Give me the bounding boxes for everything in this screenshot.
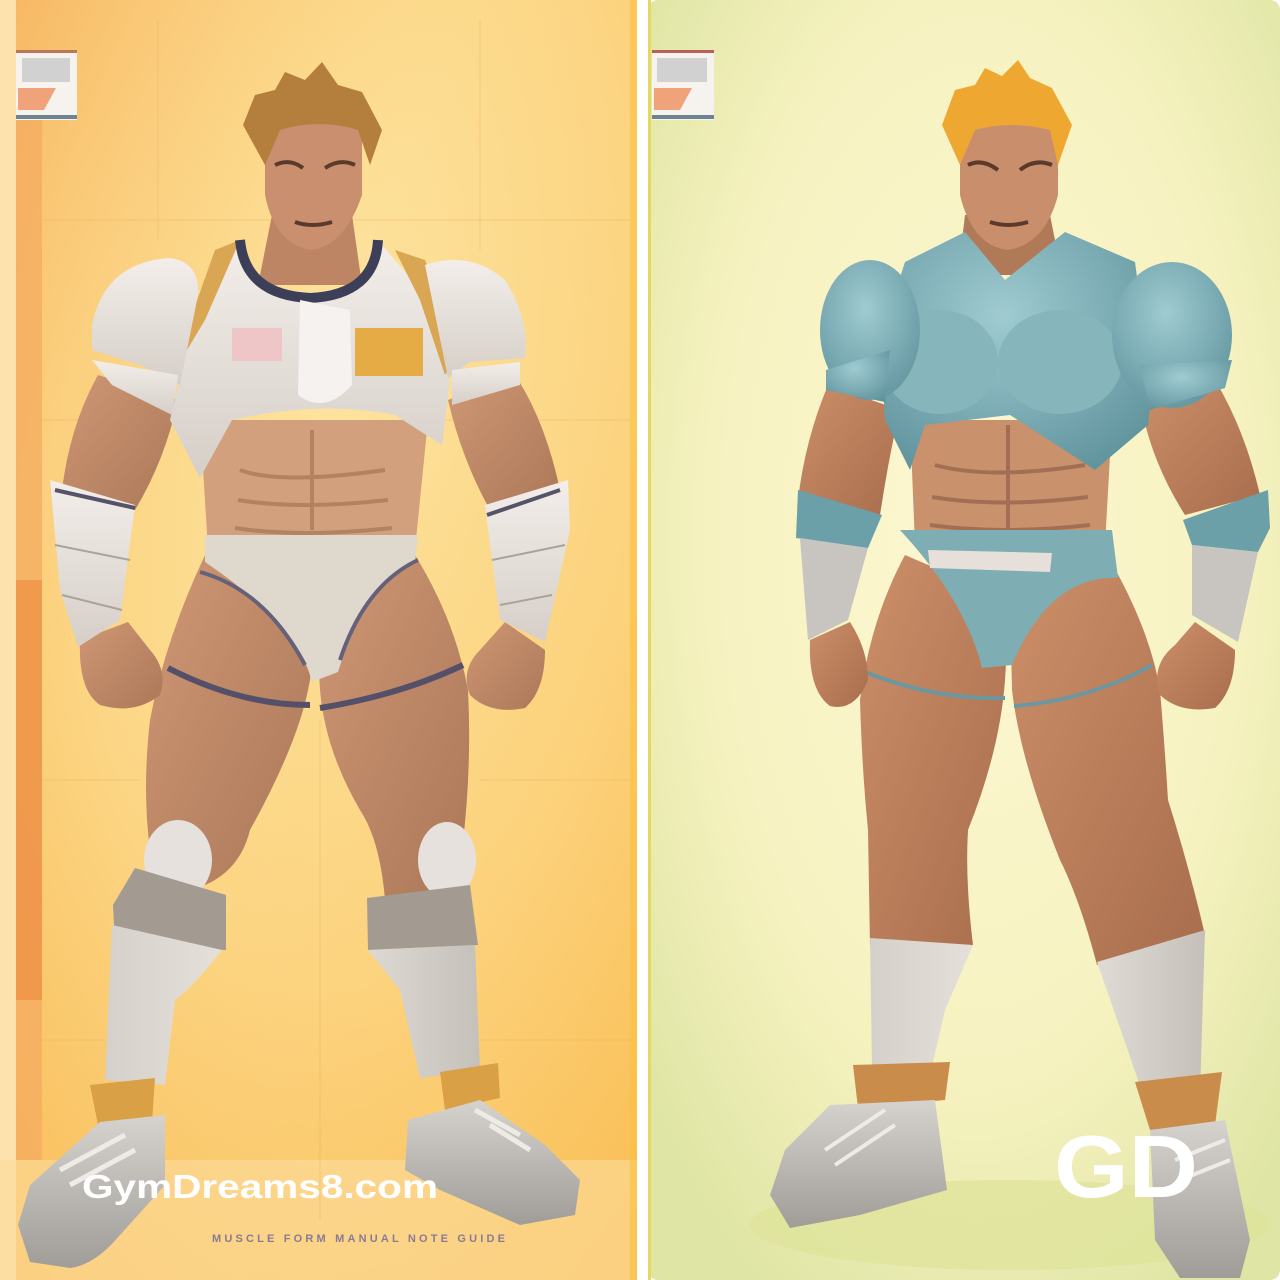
socks: [870, 930, 1205, 1100]
bracers: [796, 490, 1270, 552]
caption: small print on left panel: MUSCLE FORM MANUAL NOTE GUIDE: [212, 1233, 505, 1245]
head: [960, 115, 1058, 250]
card: right document thumbnail: [652, 50, 714, 120]
ankle pieces: [90, 1063, 500, 1125]
shoulder pads: [92, 258, 526, 415]
shoes: [770, 1100, 947, 1228]
panel: right background: [648, 0, 1280, 1280]
briefs: [900, 530, 1118, 668]
chest armor: [170, 240, 450, 478]
card: left document thumbnail: [16, 50, 77, 120]
abs: [930, 425, 1090, 540]
neck: [958, 215, 1062, 275]
figure: left character in white armor: [18, 62, 580, 1268]
grey bands: [113, 868, 478, 950]
head: [265, 110, 362, 250]
legs: [146, 555, 469, 900]
legs: [860, 555, 1205, 965]
ankle pieces: [853, 1062, 1222, 1130]
chest plates: [882, 310, 998, 414]
hair: [942, 60, 1072, 165]
thigh straps: [168, 665, 463, 708]
panel: left background: [0, 0, 637, 1280]
knee pads: [144, 820, 476, 900]
neck: [258, 215, 362, 285]
watermark: site url: GymDreams8.com: [82, 1168, 438, 1205]
shoes: [18, 1115, 165, 1268]
arms: [798, 380, 1260, 709]
torso: [910, 420, 1112, 545]
figure: right character in teal armor: [770, 60, 1270, 1278]
shoe laces: [825, 1110, 1230, 1180]
chest badges: [232, 328, 282, 361]
thigh straps: [865, 665, 1152, 706]
shoulder orbs: [820, 260, 1232, 410]
shoe laces: [60, 1110, 530, 1185]
briefs: [205, 535, 418, 682]
shirt: [880, 232, 1152, 470]
torso: [200, 420, 428, 550]
face details: [275, 162, 355, 225]
socks: [105, 925, 480, 1085]
abs: [235, 430, 392, 533]
logo: GD monogram: GD: [1054, 1117, 1198, 1216]
face details: [968, 162, 1052, 225]
bracers: [50, 480, 570, 647]
collar: [240, 240, 378, 298]
hair: [243, 62, 382, 165]
arms: [62, 375, 560, 710]
